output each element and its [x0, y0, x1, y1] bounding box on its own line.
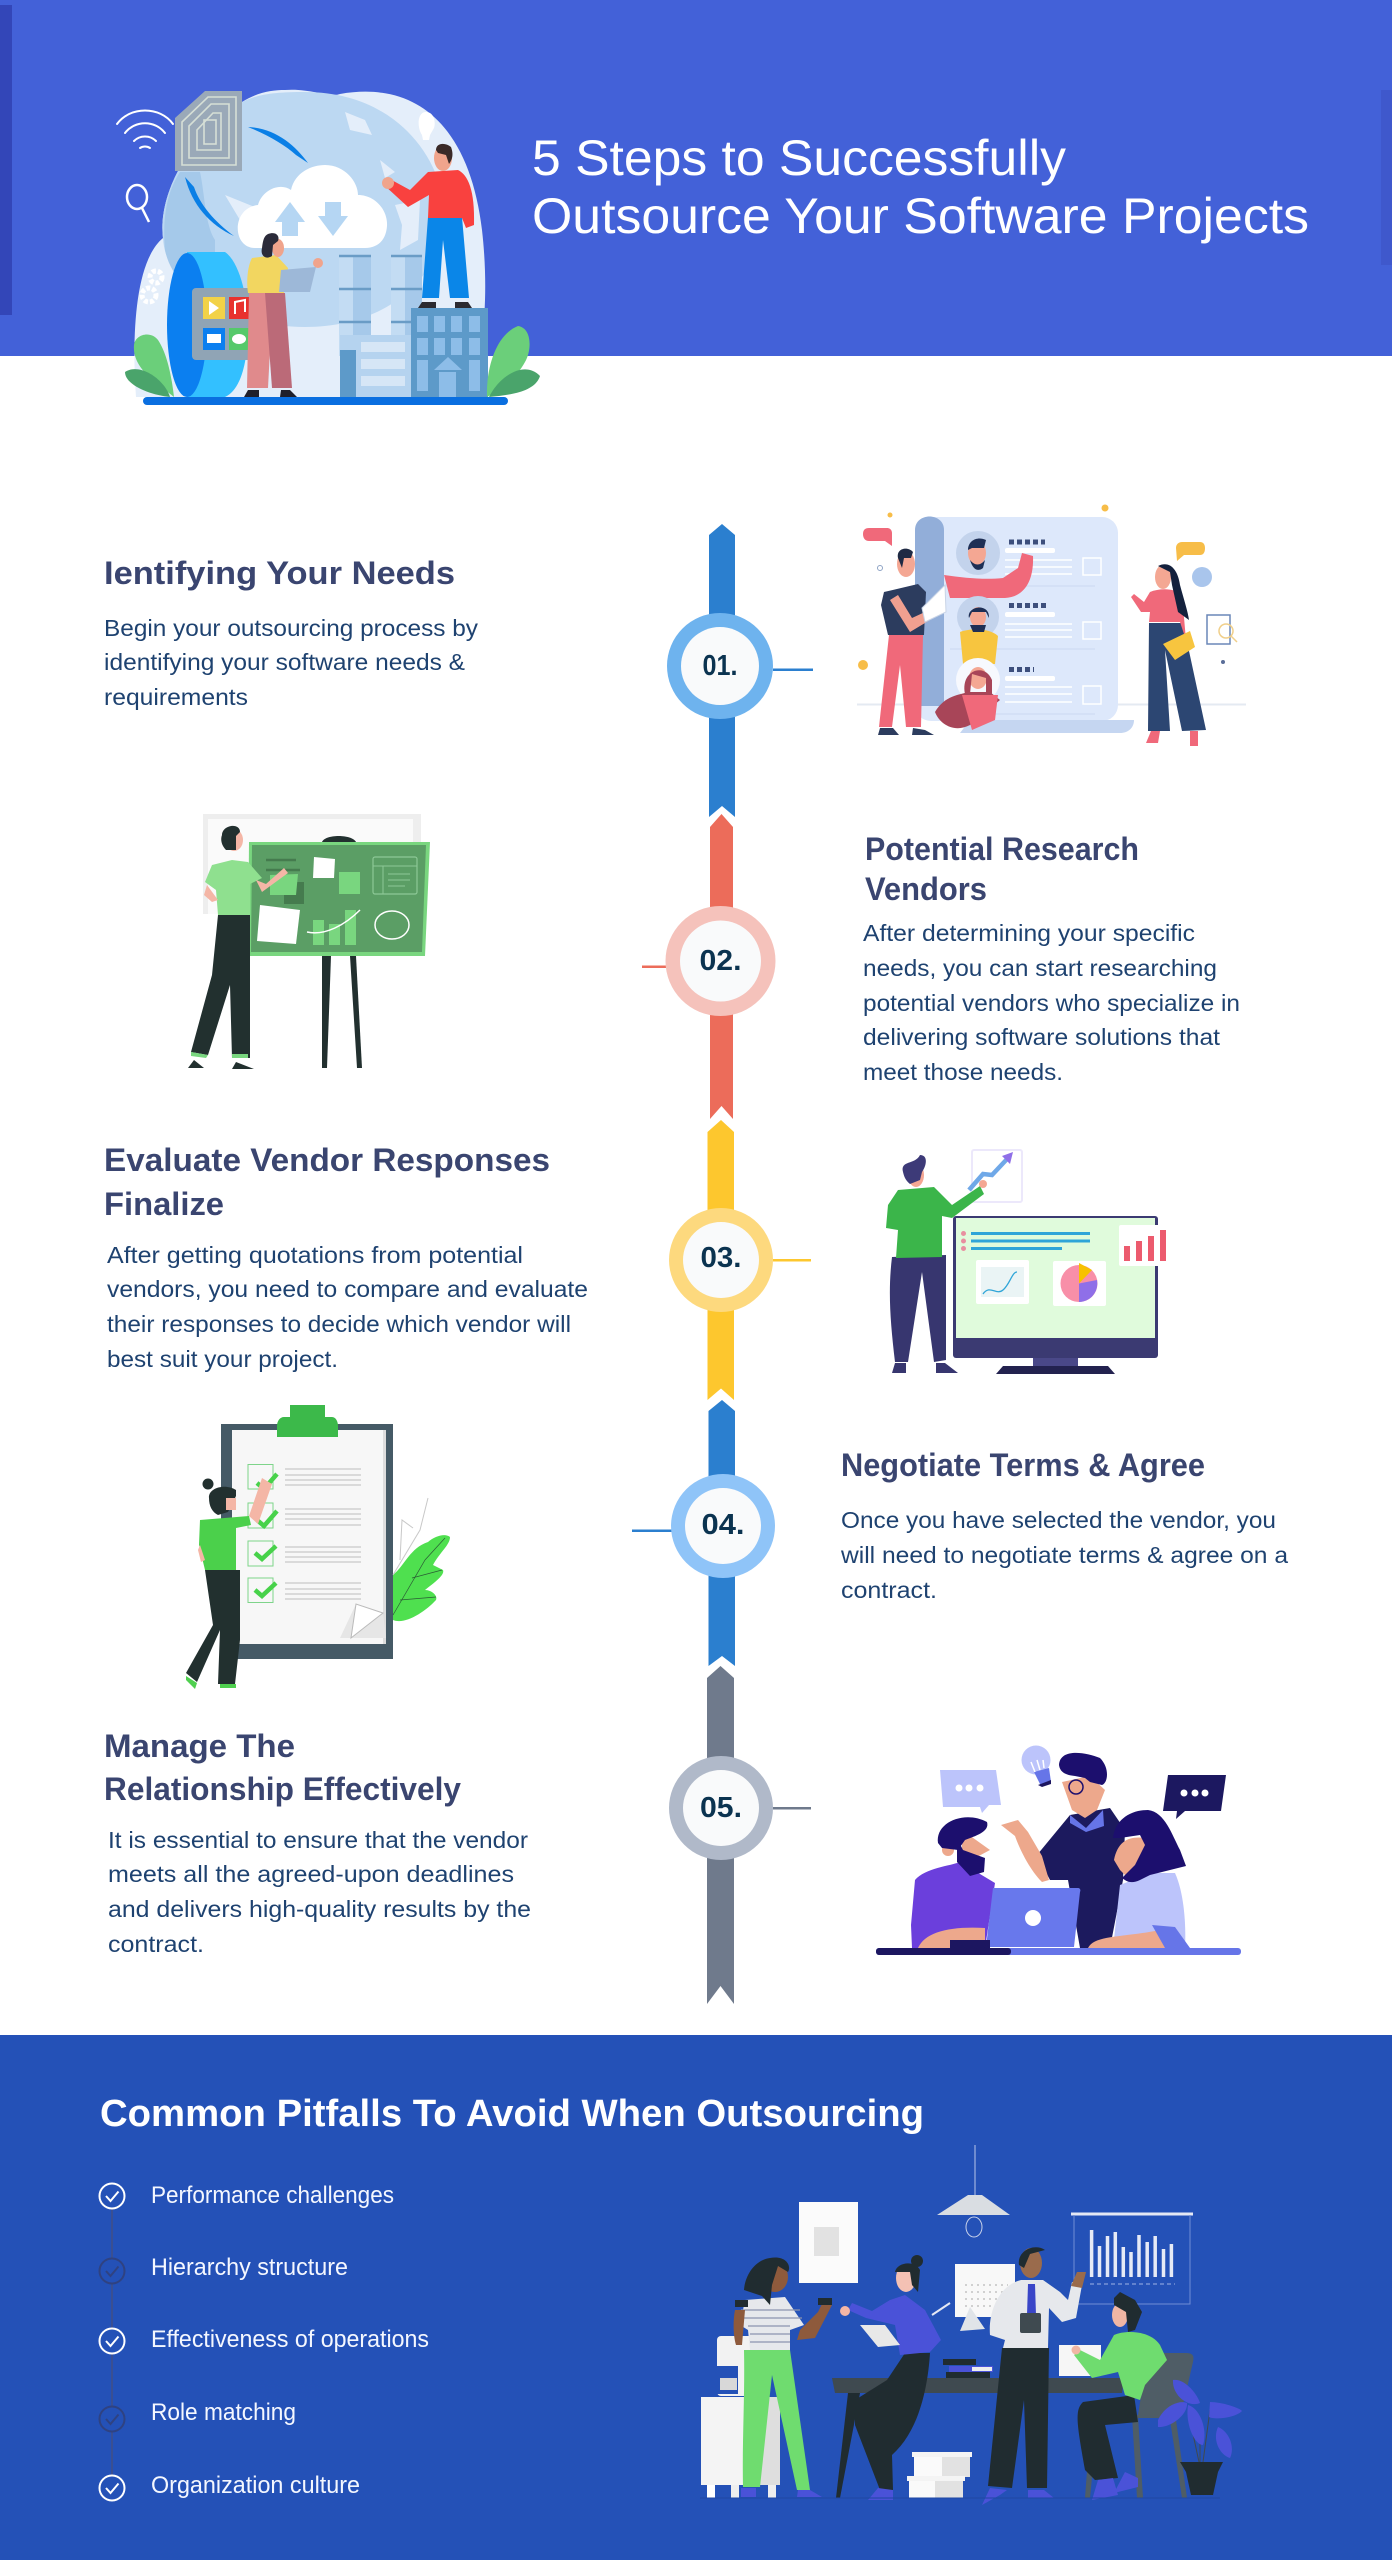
step 2 text: needs, you can start researching: [863, 955, 1217, 981]
title: 5 Steps to Successfully: [532, 130, 1066, 186]
timeline step 2: [642, 814, 776, 1119]
wall picture: [799, 2202, 858, 2283]
icon: leaf: [393, 1498, 450, 1621]
icon: clipboard with magnifier: [1207, 615, 1237, 644]
step 4 text: Once you have selected the vendor, you: [841, 1507, 1276, 1533]
laptop: [986, 1888, 1080, 1947]
figure: woman with tablet: [840, 2255, 941, 2500]
timeline step 3: 03.: [700, 1242, 742, 1274]
step 2 text: After determining your specific: [863, 920, 1195, 946]
step 5 text: Manage The: [104, 1728, 295, 1764]
water cooler: [701, 2336, 780, 2498]
figure: man in red sweater: [382, 144, 474, 308]
step 1 text: Ientifying Your Needs: [104, 555, 455, 591]
timeline step 4: [632, 1400, 775, 1666]
figure: man with clipboard: [878, 549, 946, 735]
title: [532, 130, 1309, 244]
icon: sim chip: [175, 91, 242, 171]
step 3 text: Evaluate Vendor Responses: [104, 1142, 550, 1178]
icon: arrows: [185, 127, 308, 236]
step 1 text: identifying your software needs &: [104, 649, 465, 675]
icon: cloud: [238, 165, 387, 248]
figure: man presenting: [982, 2247, 1086, 2505]
header banner: [0, 0, 1392, 356]
step 5 text: Relationship Effectively: [104, 1771, 461, 1807]
step 1 text: [104, 555, 479, 710]
step 5 text: It is essential to ensure that the vendor: [108, 1827, 528, 1853]
trend arrow: [969, 1152, 1013, 1190]
pendant lamp: [937, 2145, 1010, 2237]
footer panel: [0, 2035, 1392, 2560]
figure: woman with folder: [1131, 564, 1206, 746]
item: effectiveness of operations: Effectiveness of operations: [151, 2326, 429, 2353]
step 2 text: delivering software solutions that: [863, 1024, 1221, 1050]
ground bar: [143, 397, 508, 405]
timeline step 2: 02.: [700, 945, 742, 977]
table: [876, 1940, 1241, 1955]
figure: bearded man: [911, 1817, 995, 1948]
step 3 text: vendors, you need to compare and evaluate: [107, 1276, 588, 1302]
table: [832, 2378, 1124, 2498]
step 2 text: meet those needs.: [863, 1059, 1063, 1085]
item: role matching: Role matching: [151, 2399, 296, 2426]
figure: man standing: [1001, 1753, 1125, 1948]
icon: lightbulb: [419, 112, 435, 140]
step 1 illustration: reviewers with document: [857, 504, 1246, 746]
hero illustration: cloud, globe, people: [117, 90, 540, 405]
step 5 text: [104, 1728, 531, 1957]
board: [248, 842, 430, 956]
step 4 text: Negotiate Terms & Agree: [841, 1447, 1205, 1483]
footer heading: Common Pitfalls To Avoid When Outsourcing: [100, 2093, 924, 2135]
potted plant: [1158, 2380, 1242, 2495]
figure: analyst: [886, 1155, 987, 1373]
step 3 text: After getting quotations from potential: [107, 1242, 523, 1268]
step 4 text: [840, 1447, 1288, 1603]
step 3 text: Finalize: [104, 1186, 224, 1222]
step 5 text: contract.: [108, 1931, 204, 1957]
speech bubbles and dots: [858, 504, 1225, 670]
wall chart: [1071, 2212, 1193, 2304]
floor line: [700, 2497, 1220, 2499]
title: Outsource Your Software Projects: [532, 188, 1309, 244]
timeline step 5: 05.: [700, 1792, 742, 1824]
wall calendar: [932, 2264, 1015, 2331]
step 2 text: Vendors: [865, 871, 987, 907]
timeline step 1: 01.: [702, 650, 738, 682]
step 4 illustration: person ticking checklist: [186, 1405, 450, 1689]
step 1 text: Begin your outsourcing process by: [104, 615, 479, 641]
step 3 text: [104, 1142, 588, 1372]
step 3 text: their responses to decide which vendor will: [107, 1311, 571, 1337]
item: organization culture: Organization culture: [151, 2472, 360, 2499]
checklist: [248, 1464, 361, 1602]
item: performance challenges: Performance challenges: [151, 2182, 394, 2209]
step 2 text: potential vendors who specialize in: [863, 990, 1240, 1016]
timeline step 1: [667, 524, 813, 817]
step 5 text: meets all the agreed-upon deadlines: [108, 1861, 514, 1887]
footer illustration: office team: [700, 2145, 1242, 2505]
step 3 illustration: analyst and monitor: [886, 1150, 1172, 1374]
step 4 text: will need to negotiate terms & agree on a: [840, 1542, 1288, 1568]
item: hierarchy structure: Hierarchy structure: [151, 2254, 348, 2281]
icon: plants: [125, 326, 540, 397]
step 4 text: contract.: [841, 1577, 937, 1603]
clip: [277, 1405, 338, 1437]
speech bubbles: [940, 1770, 1226, 1819]
icon: smartwatch: [167, 252, 252, 397]
figure: woman with laptop: [244, 233, 323, 397]
step 1 text: requirements: [104, 684, 248, 710]
reviewer avatars: [935, 531, 1033, 730]
icon: wifi: [117, 110, 173, 148]
figure: woman: [186, 1478, 272, 1689]
boxes: [907, 2452, 972, 2498]
paper curl: [340, 1604, 386, 1638]
timeline step 4: 04.: [702, 1509, 744, 1541]
step 5 text: and delivers high-quality results by the: [108, 1896, 531, 1922]
books: [943, 2359, 993, 2378]
review rows: [944, 542, 1101, 714]
step 5 illustration: team discussion: [876, 1746, 1241, 1955]
step 3 text: best suit your project.: [107, 1346, 338, 1372]
icon: magnifier: [127, 185, 149, 222]
pitfalls checklist: [100, 2182, 429, 2500]
figure: woman with coffee: [734, 2257, 832, 2497]
icon: gears: [142, 271, 162, 302]
step 2 text: Potential Research: [865, 831, 1139, 867]
icon: lightbulb: [1022, 1746, 1051, 1787]
item: role matching: [100, 2399, 296, 2432]
step 2 text: [863, 831, 1240, 1085]
timeline step 5: [669, 1666, 811, 2004]
figure: factory and buildings: [339, 256, 488, 397]
figure: presenter: [188, 826, 288, 1069]
figure: seated man and chair: [1072, 2292, 1193, 2500]
step 2 illustration: person at board: [188, 814, 430, 1069]
figure: woman with long hair: [1088, 1810, 1190, 1948]
timeline step 3: [669, 1120, 811, 1400]
laptop on table: [1059, 2345, 1101, 2376]
monitor: [953, 1216, 1172, 1374]
